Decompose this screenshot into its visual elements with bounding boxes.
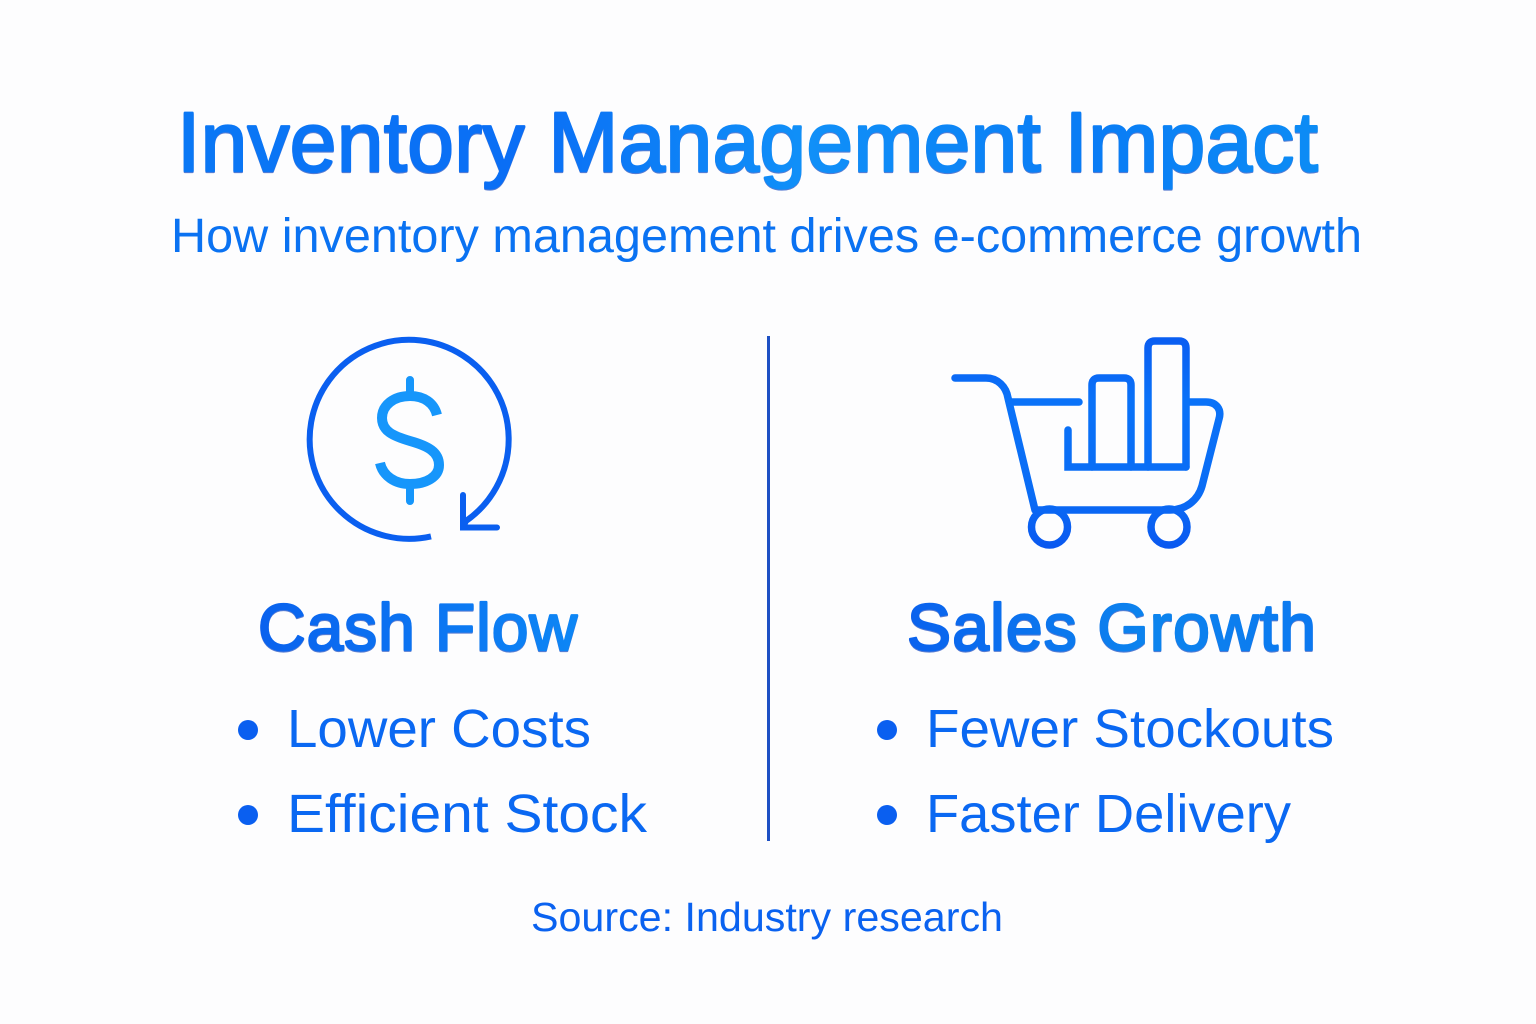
icon: shopping cart with bar chart: [955, 341, 1220, 545]
panel: cash flow: [238, 340, 648, 844]
heading: cash flow: Cash Flow: [258, 590, 577, 664]
bullet: lower costs: Lower Costs: [287, 699, 591, 759]
subtitle: How inventory management drives e-commerce growth: [171, 210, 1362, 263]
heading: sales growth: Sales Growth: [907, 590, 1316, 664]
panel: sales growth: [877, 341, 1334, 844]
divider: [767, 336, 770, 841]
bullet: efficient stock: Efficient Stock: [287, 784, 648, 844]
bullet: fewer stockouts: Fewer Stockouts: [926, 699, 1334, 759]
icon: dollar with circular arrow: [310, 340, 509, 539]
bullet: faster delivery: Faster Delivery: [926, 784, 1291, 844]
source note: Source: Industry research: [531, 894, 1003, 940]
title: Inventory Management Impact: [177, 95, 1318, 189]
